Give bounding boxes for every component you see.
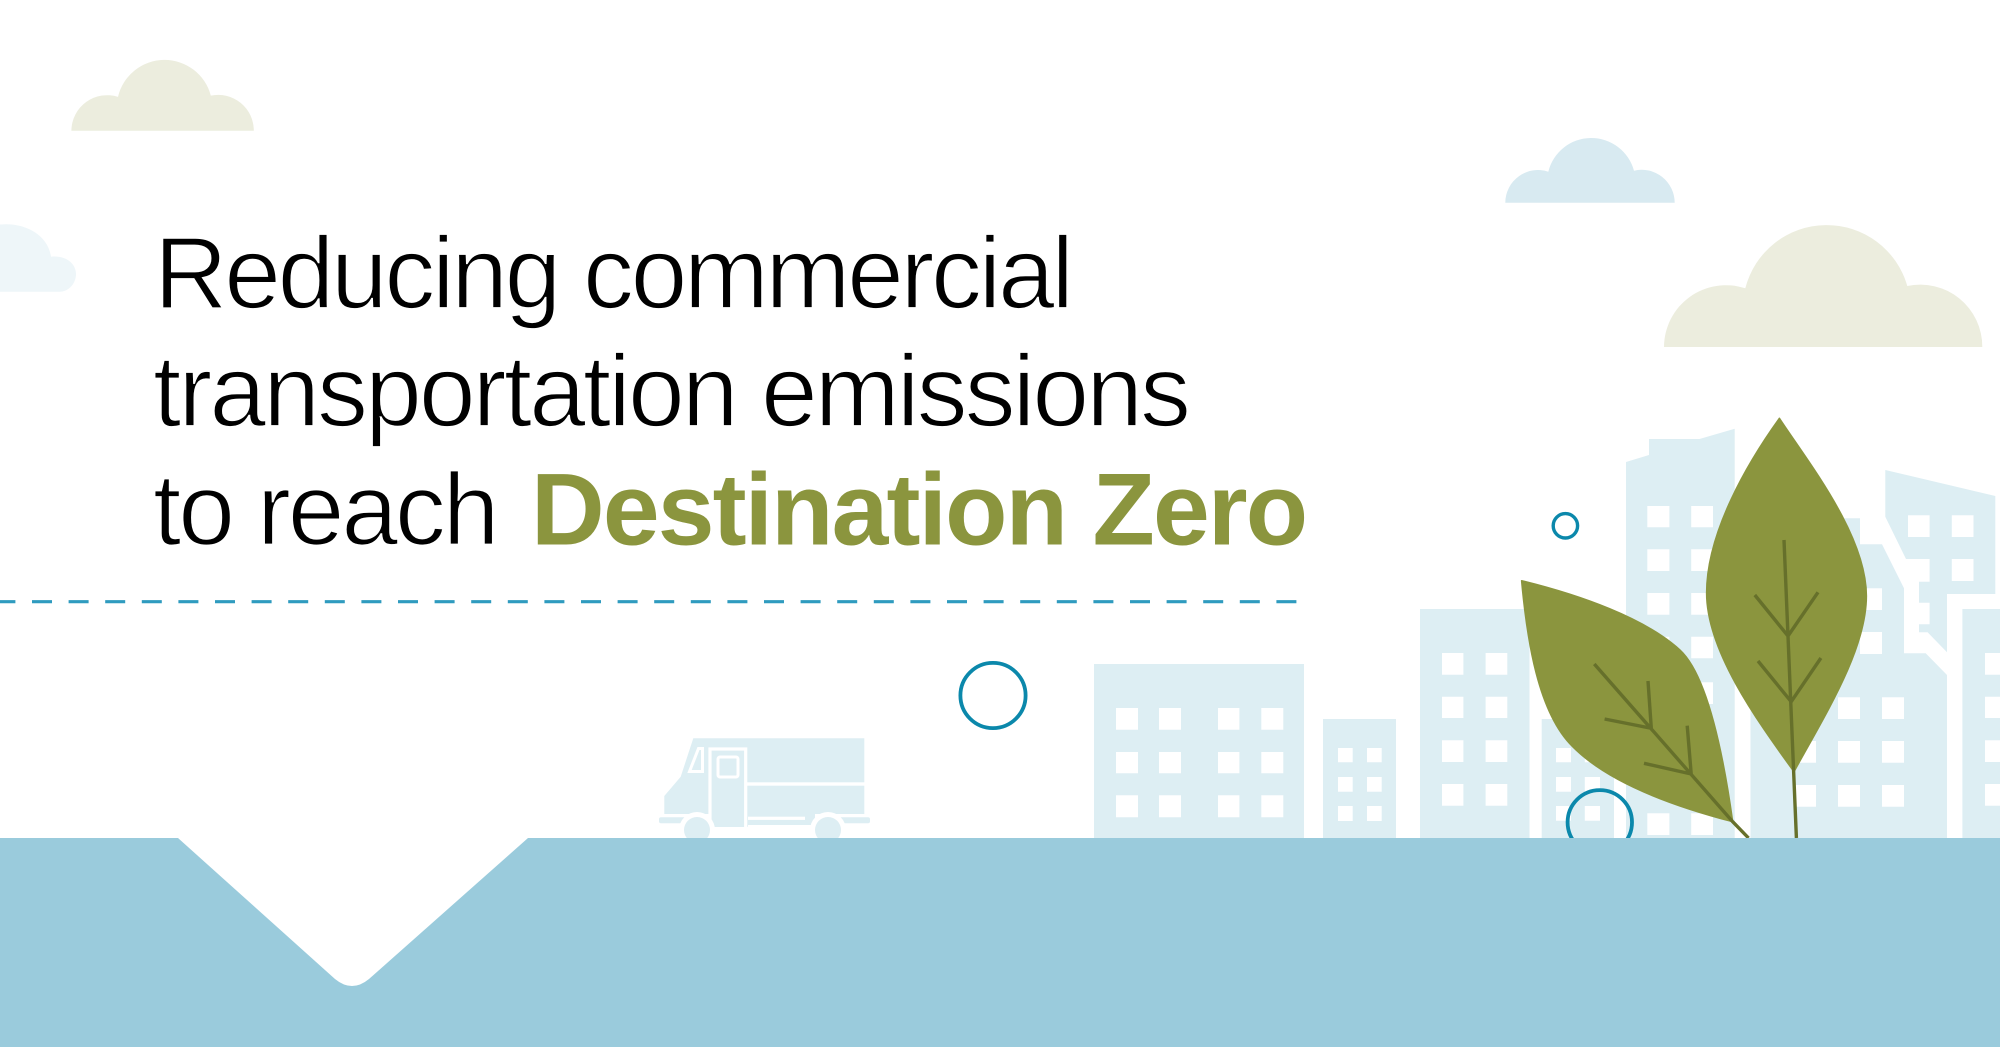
- title: [153, 216, 1308, 566]
- cloud: right beige: [1664, 225, 1982, 347]
- building: small behind leaf: [1542, 719, 1614, 838]
- white downward notch pointer: [178, 838, 528, 986]
- building: four storey: [1420, 609, 1530, 838]
- title: Reducing commercial: [154, 216, 1074, 330]
- building: far right edge: [1962, 609, 2000, 838]
- title: Destination Zero: [531, 452, 1308, 566]
- building: wide mid rise: [1094, 664, 1304, 838]
- cloud: left edge pale blue: [0, 224, 76, 292]
- dashed divider line: [0, 600, 1298, 603]
- building: small low rise: [1323, 719, 1396, 838]
- cloud: top left beige: [71, 60, 254, 131]
- cloud: upper right blue: [1505, 138, 1675, 203]
- building: stepped right block: [1750, 518, 1947, 838]
- building: tall tower: [1626, 429, 1735, 838]
- title: transportation emissions: [153, 334, 1191, 448]
- icon: ring behind ground: [1568, 790, 1632, 854]
- icon: small ring: [1553, 514, 1578, 538]
- building: upper right angled block: [1885, 470, 1995, 652]
- title: to reach: [153, 452, 500, 566]
- ground band: [0, 838, 2000, 1047]
- icon: medium ring: [960, 663, 1026, 728]
- icon: left leaf: [1522, 581, 1748, 838]
- icon: right leaf: [1707, 418, 1866, 838]
- icon: delivery truck: [659, 738, 870, 848]
